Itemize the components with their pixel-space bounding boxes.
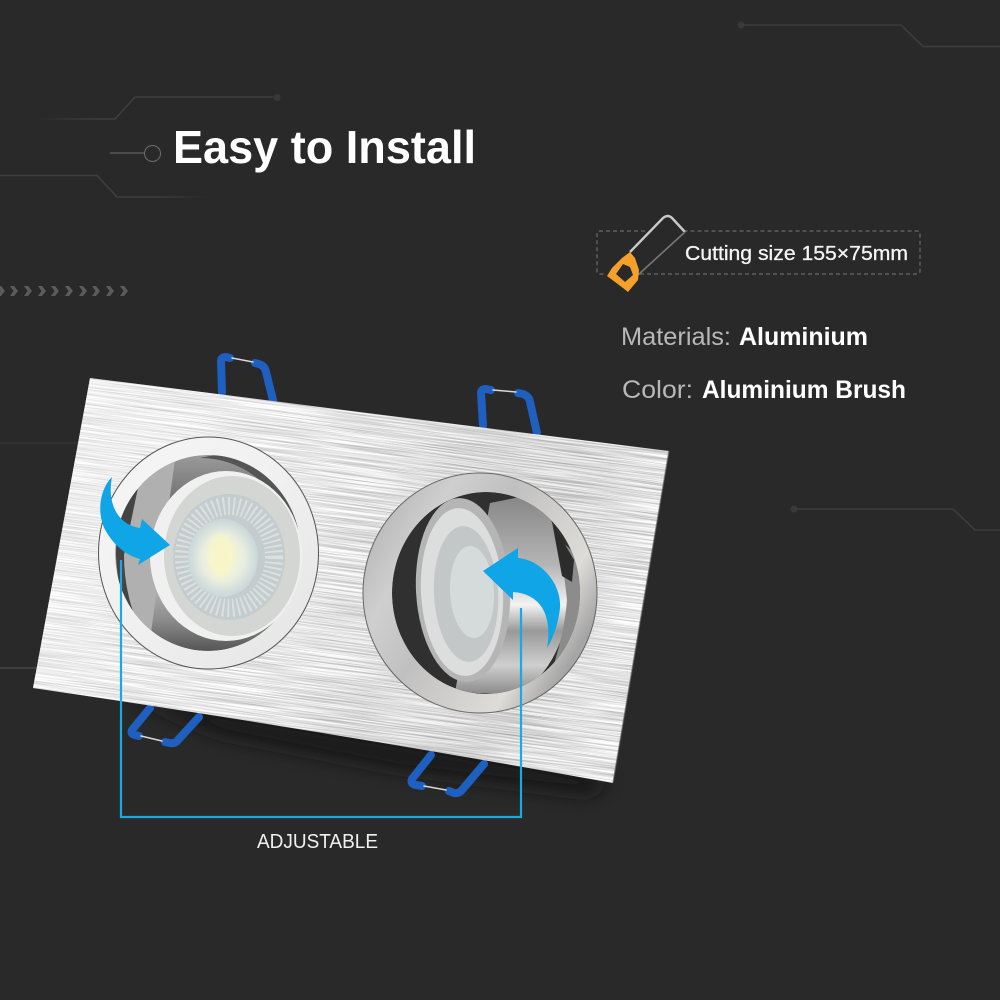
arrow right — [483, 548, 560, 648]
spring clip bottom left — [131, 708, 199, 743]
spring clip top left — [221, 357, 273, 400]
spring clip bottom right — [412, 755, 484, 793]
lamp rim — [411, 496, 515, 684]
dashed outline — [597, 231, 920, 274]
recess — [392, 492, 582, 695]
lens — [448, 545, 496, 639]
arrow left — [100, 477, 170, 565]
chevron row — [0, 286, 128, 296]
glass — [417, 506, 507, 678]
cutting size text: Cutting size 155×75mm — [685, 243, 908, 265]
lamp right — [363, 473, 597, 713]
ring — [98, 437, 318, 669]
materials line: Materials: — [621, 323, 731, 351]
recess — [115, 452, 301, 651]
lamp left — [98, 437, 318, 669]
lens — [188, 519, 258, 597]
icon: hand saw — [607, 216, 685, 292]
reflector — [430, 524, 502, 664]
ring — [363, 473, 597, 713]
reflector — [173, 494, 285, 620]
color line: Aluminium Brush — [702, 376, 906, 404]
silver body — [455, 495, 568, 695]
brushed aluminium plate — [33, 378, 669, 783]
title: Easy to Install — [173, 121, 476, 173]
panel: cutting size — [597, 216, 920, 292]
product: downlight fixture — [33, 353, 670, 800]
materials line: Aluminium — [739, 323, 868, 351]
lamp rim — [150, 471, 302, 641]
glass — [164, 476, 300, 636]
adjustable bracket — [121, 560, 521, 817]
adjustable label: ADJUSTABLE — [257, 831, 378, 853]
heading marker — [110, 146, 160, 162]
spring clip top right — [481, 389, 537, 433]
materials line — [621, 323, 868, 351]
color line: Color: — [622, 376, 693, 404]
